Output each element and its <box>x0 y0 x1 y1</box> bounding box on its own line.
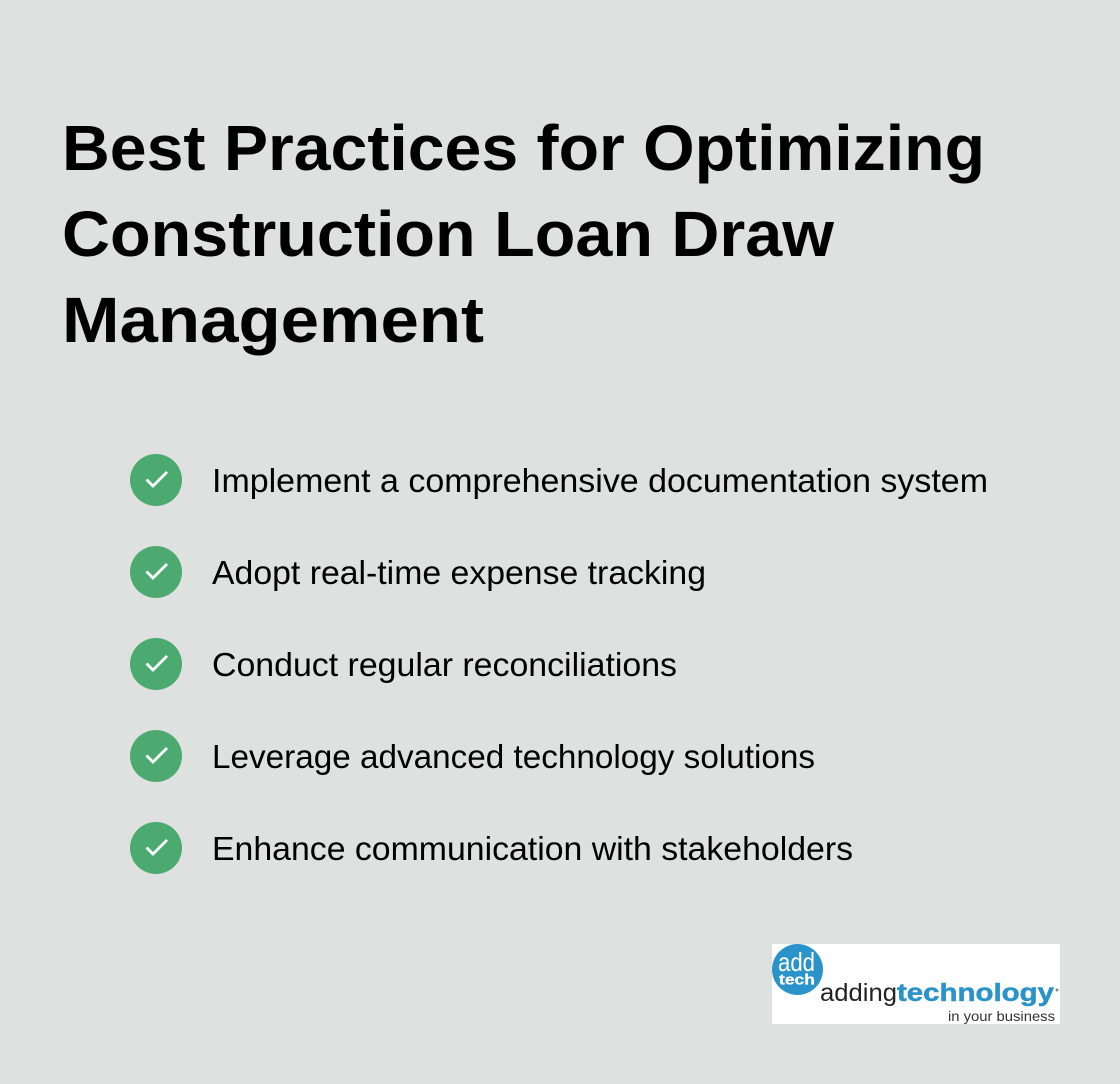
title: Best Practices for Optimizing <box>62 112 985 184</box>
logo: add <box>778 947 815 977</box>
logo: in your business <box>948 1008 1055 1024</box>
logo <box>772 944 1060 1024</box>
logo: tech <box>779 972 815 988</box>
item 2 <box>130 546 706 598</box>
item 1 <box>130 454 988 506</box>
title: Construction Loan Draw <box>62 198 834 270</box>
item 1: Implement a comprehensive documentation system <box>212 462 988 499</box>
item 3 <box>130 638 677 690</box>
logo: technology <box>897 979 1054 1007</box>
item 2: Adopt real-time expense tracking <box>212 554 706 591</box>
item 5 <box>130 822 853 874</box>
title: Management <box>62 284 484 356</box>
item 3: Conduct regular reconciliations <box>212 646 677 683</box>
item 4 <box>130 730 815 782</box>
item 5: Enhance communication with stakeholders <box>212 830 853 867</box>
item 4: Leverage advanced technology solutions <box>212 738 815 775</box>
checklist <box>130 454 988 874</box>
logo: adding <box>820 979 897 1007</box>
title <box>62 112 985 356</box>
